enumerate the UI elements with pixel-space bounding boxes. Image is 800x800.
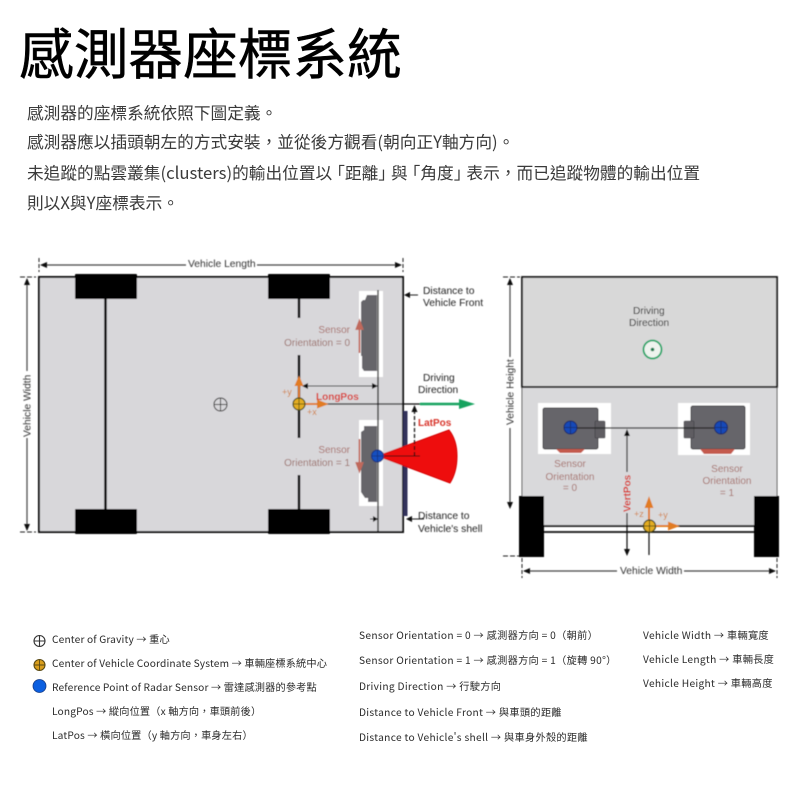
vehicle body <box>39 277 403 532</box>
vehicle shell panel <box>403 411 408 516</box>
legend column 1: Center of Vehicle Coordinate System → 車輛座標系統中心 <box>52 655 327 670</box>
wheels and axle <box>519 496 779 557</box>
label: distance to vehicle front <box>404 286 483 309</box>
vehicle coordinate origin with axes: +x <box>307 407 317 417</box>
label: distance to vehicle shell: Distance to <box>418 511 470 522</box>
legend column 2: Driving Direction → 行駛方向 <box>359 678 501 693</box>
label: sensor orientation 1: Orientation <box>703 476 751 487</box>
vehicle body lower <box>522 387 777 526</box>
legend column 1: Reference Point of Radar Sensor → 雷達感測器的參考點 <box>52 679 317 694</box>
sensor mounted, orientation 1 <box>359 420 383 506</box>
icon: center of gravity <box>214 398 227 411</box>
driving direction arrow: Driving <box>423 373 455 384</box>
vehicle length dimension: Vehicle Length <box>188 259 256 270</box>
label: sensor orientation 1: = 1 <box>720 488 735 499</box>
legend column 2: Distance to Vehicle's shell → 與車身外殼的距離 <box>359 729 588 744</box>
driving direction arrow: Direction <box>418 385 458 396</box>
sensor mounted, orientation 0 <box>359 291 383 377</box>
legend column 1 <box>52 631 327 742</box>
vehicle height dimension: Vehicle Height <box>506 359 516 425</box>
intro text: 則以X與Y座標表示。 <box>27 190 179 214</box>
VertPos dimension: VertPos <box>622 474 634 512</box>
icon: legend radar reference point <box>33 680 46 692</box>
label: sensor orientation 1: Orientation = 1 <box>284 458 350 469</box>
label: sensor orientation 1: Sensor <box>711 464 744 475</box>
LatPos dimension <box>378 405 452 456</box>
legend column 2: Sensor Orientation = 0 → 感測器方向 = 0（朝前） <box>359 627 598 642</box>
label: sensor orientation 1: Sensor <box>318 445 351 456</box>
vehicle length dimension <box>39 258 403 272</box>
driving direction out of page: Driving <box>633 306 665 317</box>
label: sensor orientation 0: Sensor <box>318 325 351 336</box>
sensor reference line <box>377 290 379 532</box>
legend column 1: LatPos → 橫向位置（y 軸方向，車身左右） <box>52 727 253 742</box>
driving direction out of page <box>629 306 669 358</box>
label: sensor orientation 1 <box>703 464 751 499</box>
diagram: top view of vehicle <box>20 258 483 535</box>
vehicle coordinate origin with axes: +y <box>658 510 668 520</box>
vehicle body upper <box>522 277 777 387</box>
label: sensor orientation 0: Sensor <box>554 459 587 470</box>
label: sensor orientation 0: Orientation <box>546 472 594 483</box>
label: distance to vehicle shell <box>370 511 482 535</box>
VertPos dimension <box>622 429 634 556</box>
label: distance to vehicle front: Distance to <box>423 286 475 297</box>
icon: legend center of vehicle coordinate system <box>34 660 45 670</box>
vehicle coordinate origin with axes: +y <box>282 387 292 397</box>
intro text <box>27 100 700 214</box>
label: distance to vehicle shell: Vehicle's shell <box>418 524 482 535</box>
label: sensor orientation 0 <box>284 321 362 353</box>
label: sensor orientation 0: = 0 <box>563 483 578 494</box>
driving direction arrow <box>299 373 475 409</box>
intro text: 未追蹤的點雲叢集(clusters)的輸出位置以「距離」與「角度」表示，而已追蹤物體的輸出位置 <box>27 160 700 184</box>
legend column 1: Center of Gravity → 重心 <box>52 631 170 646</box>
label: sensor orientation 0 <box>546 459 594 494</box>
vehicle height dimension <box>503 277 520 556</box>
LatPos dimension: LatPos <box>418 418 452 429</box>
diagram: front view of vehicle <box>503 277 779 578</box>
radar detection cone <box>378 430 457 483</box>
LongPos dimension <box>302 383 378 403</box>
legend column 1: LongPos → 縱向位置（x 軸方向，車頭前後） <box>52 703 261 718</box>
legend column 3: Vehicle Length → 車輛長度 <box>643 651 774 666</box>
label: distance to vehicle front: Vehicle Front <box>423 298 483 309</box>
vehicle width dimension: Vehicle Width <box>22 374 34 437</box>
label: sensor orientation 1 <box>284 439 362 471</box>
vehicle width dimension: Vehicle Width <box>620 566 683 577</box>
LongPos dimension: LongPos <box>316 392 359 403</box>
intro text: 感測器的座標系統依照下圖定義。 <box>27 100 277 124</box>
label: sensor orientation 0: Orientation = 0 <box>284 338 350 349</box>
title: 感測器座標系統 <box>19 11 402 90</box>
vehicle width dimension <box>522 558 777 578</box>
wheels and axles <box>75 274 330 534</box>
vehicle coordinate origin with axes <box>282 378 326 417</box>
legend column 3 <box>643 627 774 690</box>
legend column 3: Vehicle Width → 車輛寬度 <box>643 627 769 642</box>
icon: legend center of gravity <box>34 636 45 646</box>
vehicle coordinate origin with axes: +z <box>634 509 644 519</box>
left sensor <box>538 403 611 454</box>
vehicle width dimension <box>20 277 36 532</box>
legend column 2: Distance to Vehicle Front → 與車頭的距離 <box>359 704 562 719</box>
sensor connecting line <box>577 427 714 429</box>
driving direction out of page: Direction <box>629 318 669 329</box>
legend column 2: Sensor Orientation = 1 → 感測器方向 = 1（旋轉 90°） <box>359 652 617 667</box>
radar sensor reference point <box>372 450 384 462</box>
legend column 3: Vehicle Height → 車輛高度 <box>643 675 773 690</box>
intro text: 感測器應以插頭朝左的方式安裝，並從後方觀看(朝向正Y軸方向)。 <box>27 129 514 153</box>
legend column 2 <box>359 627 617 744</box>
right sensor <box>678 403 750 455</box>
vehicle coordinate origin with axes <box>634 499 677 532</box>
